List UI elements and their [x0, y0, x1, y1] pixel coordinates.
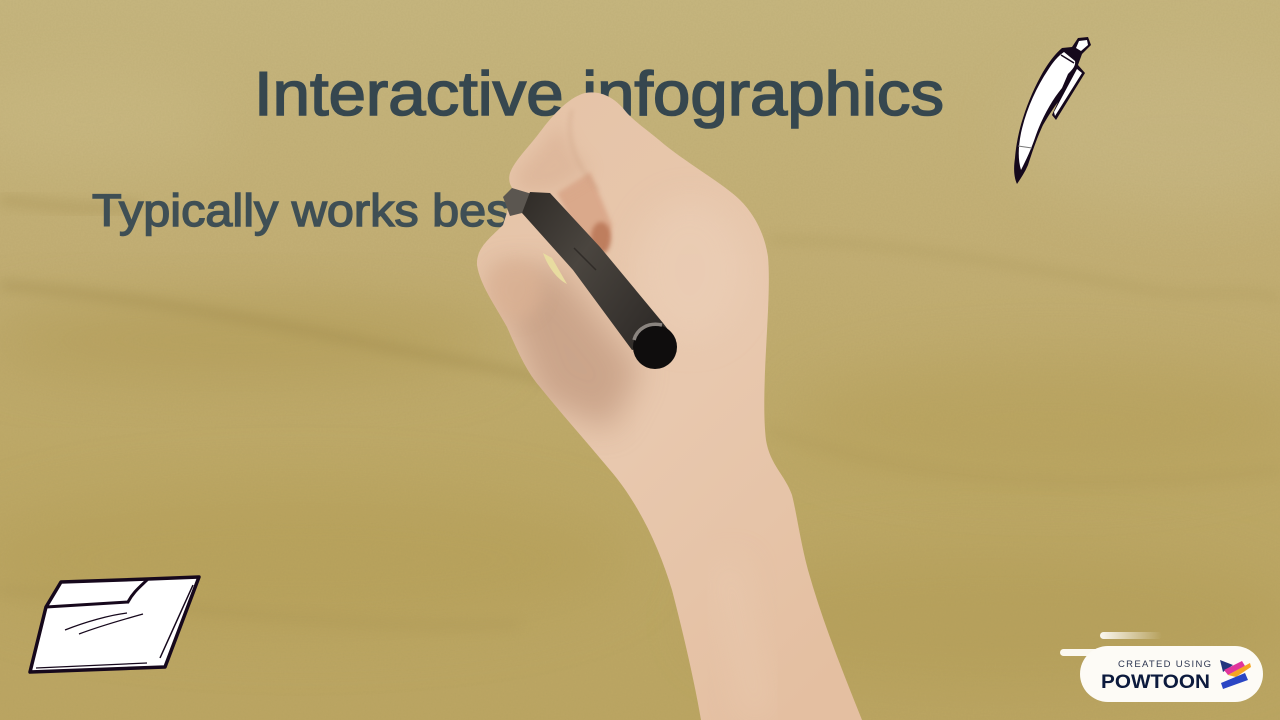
icon: powtoon logo — [1220, 660, 1251, 689]
icon: pen — [1014, 37, 1091, 184]
speed streaks — [1060, 632, 1162, 656]
marker pen — [503, 188, 677, 369]
powtoon badge — [1060, 632, 1263, 702]
lower shadow below marker — [490, 270, 640, 430]
title: Interactive infographics — [254, 60, 944, 129]
index finger side shade — [520, 134, 580, 190]
hand — [477, 92, 862, 720]
badge wordmark: POWTOON — [1101, 672, 1210, 693]
icon: folder — [30, 577, 199, 672]
badge caption: CREATED USING — [1118, 659, 1211, 670]
middle finger crease — [557, 172, 613, 242]
hand holding marker — [477, 92, 862, 720]
subtitle text: Typically works best — [92, 185, 525, 236]
